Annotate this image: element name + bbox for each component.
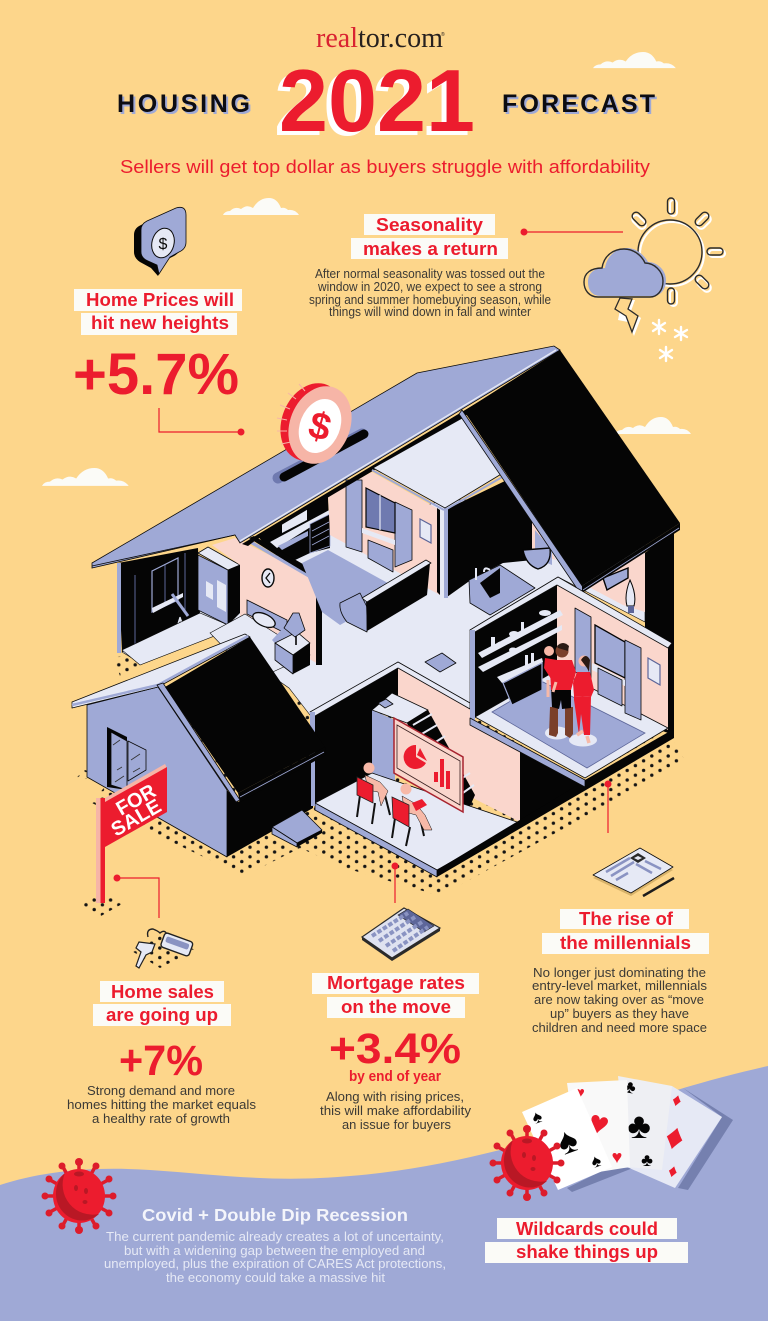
icon: weather sun cloud snow: [584, 198, 725, 361]
leader: home prices: [159, 408, 244, 436]
child: [544, 646, 568, 697]
man: [549, 643, 576, 738]
text: covid body: [104, 1230, 446, 1285]
roof eave: [92, 350, 556, 566]
heading: home sales: [93, 981, 231, 1026]
text: millennials body: No longer just dominating the: [533, 966, 706, 980]
text: seasonality body: window in 2020, we expect to see a strong: [317, 280, 542, 294]
heading: wildcards: shake things up: [516, 1242, 658, 1262]
text: seasonality body: [309, 267, 551, 319]
card: spades: [522, 1088, 612, 1190]
text: covid body: but with a widening gap between the employed and: [124, 1244, 425, 1258]
card: diamonds: ♦: [666, 1160, 680, 1182]
text: covid body: The current pandemic already creates a lot of uncertainty,: [106, 1230, 444, 1244]
telescope: [172, 594, 188, 640]
coin slot: [278, 434, 364, 478]
heading: seasonality: makes a return: [363, 239, 498, 259]
subtitle: Sellers will get top dollar as buyers struggle with affordability: [120, 156, 651, 177]
garage roof right: [157, 637, 326, 802]
back kitchen: [257, 497, 333, 561]
presentation board: [394, 718, 463, 812]
stair block: [372, 693, 475, 815]
text: seasonality body: things will wind down in fall and winter: [329, 305, 531, 319]
kitchen shelves: [478, 610, 563, 683]
card: diamonds: [627, 1086, 722, 1188]
bedroom furniture: [210, 600, 310, 680]
heading: the rise of the millennials: the millennials: [560, 933, 691, 953]
card: hearts: ♥: [575, 1085, 585, 1102]
cloud: right of roof: [615, 417, 691, 434]
logo: realtor.com: [316, 22, 445, 54]
text: by end of year: by end of year: [349, 1068, 441, 1085]
right outer black wall: [645, 530, 674, 735]
wall clock: [262, 569, 274, 587]
rear pink wall with window: [328, 472, 440, 595]
card: hearts: [567, 1080, 630, 1175]
logo: realtor.com: real: [316, 22, 358, 54]
heading: wildcards: [485, 1218, 688, 1263]
card: spades: ♠: [588, 1150, 604, 1172]
coin: $: [304, 404, 335, 450]
heading: seasonality: [351, 214, 508, 259]
text: mortgage body: an issue for buyers: [342, 1118, 451, 1132]
leader: seasonality: [520, 228, 623, 236]
left room: [117, 547, 240, 665]
title: HOUSING: [117, 90, 250, 118]
front bathroom room: [470, 577, 672, 787]
heading: home sales: are going up: [106, 1005, 218, 1025]
text: seasonality body: After normal seasonality was tossed out the: [315, 267, 545, 281]
heading: seasonality: Seasonality: [376, 215, 483, 235]
title: FORECAST: [504, 92, 657, 120]
logo: realtor.com: tor.com: [358, 22, 443, 54]
for sale sign: [96, 764, 167, 903]
main roof right slope: [459, 350, 680, 593]
logo: realtor.com: ®: [441, 31, 445, 38]
window with curtains: [575, 608, 660, 720]
garage roof left: [72, 634, 250, 708]
title: 2021: [279, 51, 475, 150]
heading: mortgage rates: Mortgage rates: [327, 973, 465, 993]
coin: [269, 374, 363, 473]
text: covid body: unemployed, plus the expiration of CARES Act protections,: [104, 1257, 446, 1271]
cloud: mid left: [223, 198, 299, 215]
icon: dollar speech bubble: [134, 207, 186, 276]
heading: the rise of the millennials: [542, 909, 709, 954]
icon: calculator: [362, 908, 440, 961]
card: clubs: [618, 1076, 672, 1170]
icon: virus left: [42, 1158, 116, 1234]
main roof left slope: [92, 346, 560, 568]
icon: keys: [130, 929, 195, 968]
text: home sales body: homes hitting the market equals: [67, 1098, 256, 1112]
leader: mortgage: [392, 862, 398, 903]
chair and person right: [392, 784, 432, 846]
corridor floor tile: [425, 653, 456, 672]
black centre wall: [444, 480, 533, 598]
left room shelf: [152, 593, 183, 613]
text: home sales body: a healthy rate of growth: [92, 1112, 230, 1126]
text: mortgage body: Along with rising prices,: [326, 1090, 464, 1104]
text: mortgage body: [320, 1090, 472, 1132]
card: spades: ♠: [529, 1106, 545, 1128]
heading: home sales: Home sales: [111, 982, 214, 1002]
oven: [503, 663, 542, 705]
icon: virus right: [490, 1125, 564, 1201]
card: clubs: ♣: [627, 1105, 651, 1146]
for sale sign: FOR: [112, 780, 160, 820]
card: hearts: ♥: [584, 1103, 613, 1145]
text: covid body: the economy could take a massive hit: [166, 1271, 386, 1285]
wardrobe: [198, 547, 240, 625]
leader: home sales: [114, 874, 159, 918]
card: diamonds: ♦: [661, 1114, 689, 1159]
pink divider wall: [212, 536, 322, 665]
family: [544, 643, 597, 746]
card: diamonds: ♦: [670, 1089, 684, 1111]
heading: the rise of the millennials: The rise of: [579, 909, 674, 929]
title: 2021: [274, 55, 470, 154]
icon: newspaper and pen: [593, 848, 674, 896]
heading: wildcards: Wildcards could: [516, 1219, 658, 1239]
heading: home prices: hit new heights: [91, 313, 229, 333]
heading: mortgage rates: on the move: [341, 997, 451, 1017]
icon: dollar speech bubble: $: [159, 236, 168, 253]
title: HOUSING: [119, 92, 252, 120]
text: millennials body: [532, 966, 707, 1035]
cloud: left of roof: [42, 468, 129, 486]
bathtub: [469, 565, 535, 615]
text: seasonality body: spring and summer homebuying season, while: [309, 293, 551, 307]
garage: [72, 634, 326, 857]
card: clubs: ♣: [622, 1076, 638, 1098]
card: spades: ♠: [551, 1118, 583, 1163]
stat: +5.7%: +5.7%: [73, 342, 239, 407]
text: millennials body: children and need more space: [532, 1021, 707, 1035]
heading: home prices: [74, 289, 242, 335]
bottom wave panel: [0, 1066, 768, 1321]
text: millennials body: are now taking over as “move: [534, 993, 704, 1007]
for sale sign: SALE: [108, 795, 165, 841]
chair and person left: [357, 762, 390, 824]
card: hearts: ♥: [612, 1147, 622, 1167]
text: home sales body: Strong demand and more: [87, 1084, 235, 1098]
text: millennials body: entry-level market, millennials: [532, 979, 707, 993]
gable ceiling: [373, 417, 503, 508]
rear right pink walls: [532, 518, 645, 613]
title: FORECAST: [502, 90, 655, 118]
title: [117, 51, 657, 154]
text: mortgage body: this will make affordability: [320, 1104, 472, 1118]
heading: covid and double dip recession: Covid + Double Dip Recession: [142, 1205, 408, 1225]
sofa: [340, 560, 431, 632]
text: home sales body: [67, 1084, 256, 1126]
card: clubs: ♣: [641, 1150, 653, 1170]
living room rug: [302, 550, 395, 625]
cloud: top right: [593, 52, 676, 68]
isometric house: [72, 346, 680, 877]
lower room: [310, 662, 674, 877]
doorstep: [272, 810, 322, 847]
woman: [573, 656, 594, 743]
upper floor: [122, 500, 645, 715]
stat: +3.4%: +3.4%: [329, 1025, 461, 1073]
text: millennials body: up” buyers as they have: [550, 1007, 689, 1021]
heading: mortgage rates: [312, 973, 479, 1018]
halftone dots under house: [76, 654, 686, 916]
leader: millennials: [604, 780, 612, 833]
heading: home prices: Home Prices will: [86, 290, 234, 310]
toilet: [523, 530, 552, 569]
garage door window: [107, 727, 146, 790]
playing cards: [522, 1076, 733, 1192]
stat: +7%: +7%: [119, 1037, 203, 1085]
